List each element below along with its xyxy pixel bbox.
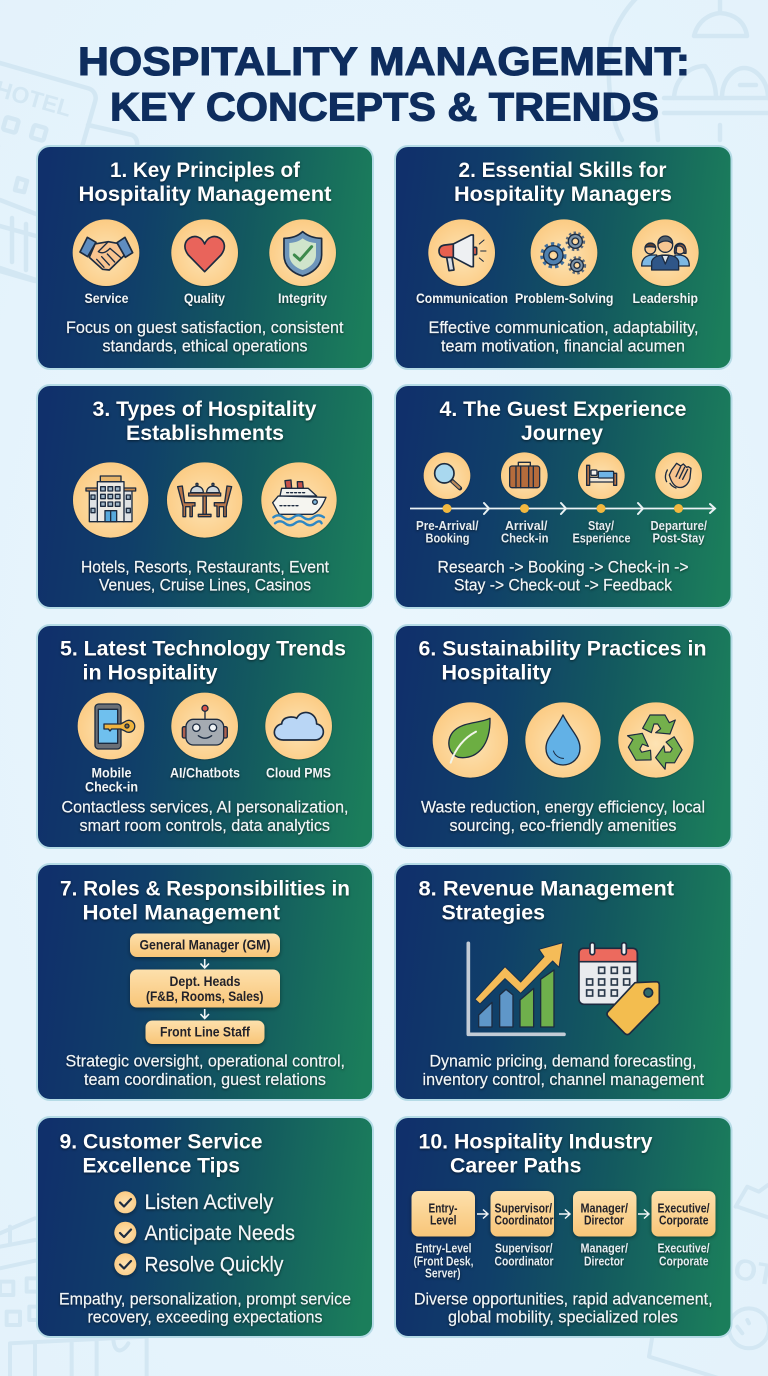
chart: rising bars and arrow xyxy=(468,943,564,1034)
icon: mobile check-in xyxy=(78,693,144,759)
journey stage labels: Pre-Arrival/ xyxy=(416,519,479,533)
career flow xyxy=(412,1191,716,1236)
panel: 6 sustainability xyxy=(395,625,732,848)
career stage labels: Corporate xyxy=(659,1254,709,1268)
heading 2 xyxy=(454,159,672,206)
heading 4 xyxy=(440,398,686,445)
description 3: Hotels, Resorts, Restaurants, Event xyxy=(81,558,329,576)
description 2: Effective communication, adaptability, xyxy=(428,318,698,337)
career flow: Corporate xyxy=(659,1214,709,1228)
career stage labels: Executive/ xyxy=(658,1242,710,1256)
icon: heart xyxy=(171,219,238,286)
icon: hotel building xyxy=(73,462,148,538)
heading 7 xyxy=(60,878,350,924)
description 6: sourcing, eco-friendly amenities xyxy=(450,816,676,835)
career stage labels: Coordinator xyxy=(494,1254,554,1268)
description 9: Empathy, personalization, prompt service xyxy=(59,1290,351,1308)
heading 6: Hospitality xyxy=(442,662,552,684)
description 1: standards, ethical operations xyxy=(102,336,308,356)
heading 2: Hospitality Managers xyxy=(454,183,672,206)
heading 10 xyxy=(418,1130,653,1178)
description 4: Research -> Booking -> Check-in -> xyxy=(438,558,689,576)
description 1 xyxy=(66,318,344,356)
heading 3: 3. Types of Hospitality xyxy=(92,398,317,421)
description 7: team coordination, guest relations xyxy=(84,1070,326,1089)
icon: water drop xyxy=(525,702,601,778)
title: KEY CONCEPTS & TRENDS xyxy=(110,86,659,130)
heading 1: Hospitality Management xyxy=(78,183,332,206)
heading 8: 8. Revenue Management xyxy=(418,878,674,900)
description 5: Contactless services, AI personalization, xyxy=(62,798,348,816)
icon: handshake xyxy=(73,219,139,286)
heading 9: Excellence Tips xyxy=(82,1154,240,1178)
org chart: General Manager (GM) xyxy=(140,938,270,952)
watermark: hotel and bell bottom right xyxy=(649,1185,768,1376)
watermark: cloche and globe top right xyxy=(609,0,768,140)
icon: megaphone xyxy=(428,219,495,286)
journey timeline xyxy=(410,503,715,514)
career stage labels: Manager/ xyxy=(580,1242,628,1256)
panel: 5 technology trends xyxy=(37,625,373,848)
description 7 xyxy=(66,1052,345,1089)
journey stage labels: Stay/ xyxy=(588,519,614,533)
org chart: Dept. Heads xyxy=(170,974,240,989)
icon labels 2: Communication xyxy=(416,291,508,306)
icon: cruise ship xyxy=(261,462,337,538)
heading 8 xyxy=(418,878,674,924)
heading 5: in Hospitality xyxy=(82,662,218,684)
watermark: hotel top left xyxy=(0,46,137,283)
description 3: Venues, Cruise Lines, Casinos xyxy=(99,576,311,594)
icon: cloud xyxy=(265,693,332,759)
icon labels 2 xyxy=(416,291,698,306)
journey stage labels xyxy=(416,519,707,546)
heading 3: Establishments xyxy=(126,422,284,445)
panel: 10 career paths xyxy=(395,1117,732,1337)
journey stage labels: Post-Stay xyxy=(652,532,705,546)
career stage labels: (Front Desk, xyxy=(414,1254,474,1268)
icon: leaf xyxy=(433,702,508,778)
org chart xyxy=(130,934,280,1044)
heading 2: 2. Essential Skills for xyxy=(458,159,666,182)
description 1: Focus on guest satisfaction, consistent xyxy=(66,318,344,337)
icon labels 1 xyxy=(84,291,327,306)
description 10: Diverse opportunities, rapid advancement, xyxy=(414,1290,712,1308)
career stage labels: Server) xyxy=(425,1266,460,1280)
icon labels 2: Problem-Solving xyxy=(515,291,614,306)
panel: 4 guest journey xyxy=(395,385,732,608)
heading 4: Journey xyxy=(521,422,603,445)
career stage labels xyxy=(414,1242,710,1280)
career flow: Supervisor/ xyxy=(494,1202,552,1216)
heading 8: Strategies xyxy=(442,902,545,924)
heading 5 xyxy=(60,638,346,684)
heading 6 xyxy=(418,638,706,684)
panel: 1 key principles xyxy=(37,146,373,369)
career flow: Manager/ xyxy=(580,1202,628,1216)
icon: magnifier xyxy=(424,452,470,499)
heading 9: 9. Customer Service xyxy=(60,1130,262,1154)
heading 9 xyxy=(60,1130,262,1178)
description 4: Stay -> Check-out -> Feedback xyxy=(454,576,672,594)
description 5: smart room controls, data analytics xyxy=(80,816,330,835)
heading 10: Career Paths xyxy=(450,1154,582,1178)
icon labels 1: Service xyxy=(84,291,129,306)
icon labels 2: Leadership xyxy=(632,291,698,306)
career flow: Level xyxy=(430,1214,456,1228)
icon labels 5: Cloud PMS xyxy=(266,766,331,780)
panel: 7 roles xyxy=(37,864,373,1100)
journey stage labels: Booking xyxy=(426,532,470,546)
org chart: Front Line Staff xyxy=(160,1024,250,1040)
icon: calendar and price tag xyxy=(579,943,659,1035)
checklist: Resolve Quickly xyxy=(144,1254,284,1276)
icon: dining table xyxy=(167,462,242,538)
org chart: (F&B, Rooms, Sales) xyxy=(146,989,264,1004)
icon: recycle xyxy=(618,702,694,778)
career flow: Coordinator xyxy=(494,1214,554,1228)
description 8: Dynamic pricing, demand forecasting, xyxy=(430,1052,696,1070)
heading 6: 6. Sustainability Practices in xyxy=(418,638,706,660)
heading 10: 10. Hospitality Industry xyxy=(418,1130,653,1154)
description 5 xyxy=(62,798,348,835)
journey stage labels: Departure/ xyxy=(650,519,707,533)
heading 7: Hotel Management xyxy=(82,902,280,924)
checklist: Anticipate Needs xyxy=(144,1222,295,1245)
checklist: Listen Actively xyxy=(144,1191,274,1214)
heading 1 xyxy=(78,159,332,206)
icon: waving hand xyxy=(655,452,702,499)
icon: shield xyxy=(269,219,336,286)
description 6: Waste reduction, energy efficiency, local xyxy=(421,798,705,816)
icon labels 5: Mobile xyxy=(92,766,132,780)
icon: gears xyxy=(531,219,597,286)
journey stage labels: Esperience xyxy=(572,532,631,546)
icon labels 5: AI/Chatbots xyxy=(170,766,240,780)
heading 7: 7. Roles & Responsibilities in xyxy=(60,878,350,900)
journey stage labels: Check-in xyxy=(501,532,548,546)
description 9: recovery, exceeding expectations xyxy=(88,1308,322,1326)
description 8 xyxy=(422,1052,704,1089)
watermark: hotel bottom left xyxy=(0,1218,147,1376)
panel: 9 customer service xyxy=(37,1117,373,1337)
description 2: team motivation, financial acumen xyxy=(441,336,685,356)
career stage labels: Supervisor/ xyxy=(495,1242,553,1256)
journey stage labels: Arrival/ xyxy=(505,519,548,533)
icon labels 1: Quality xyxy=(184,291,225,306)
heading 5: 5. Latest Technology Trends xyxy=(60,638,346,660)
icon labels 5 xyxy=(85,766,331,794)
career stage labels: Entry-Level xyxy=(416,1242,472,1256)
icon labels 1: Integrity xyxy=(278,291,327,306)
title: HOSPITALITY MANAGEMENT: xyxy=(78,40,690,84)
description 3 xyxy=(81,558,329,594)
career flow: Director xyxy=(584,1214,624,1228)
description 10: global mobility, specialized roles xyxy=(448,1308,678,1326)
heading 3 xyxy=(92,398,317,445)
description 7: Strategic oversight, operational control, xyxy=(66,1052,345,1070)
description 10 xyxy=(414,1290,712,1326)
checklist xyxy=(114,1191,295,1276)
description 2 xyxy=(428,318,698,356)
icon: robot xyxy=(171,693,238,759)
description 6 xyxy=(421,798,705,835)
career flow: Executive/ xyxy=(658,1202,710,1216)
panel: 3 establishments xyxy=(37,385,373,608)
description 4 xyxy=(438,558,689,594)
panel: 2 essential skills xyxy=(395,146,732,369)
career flow: Entry- xyxy=(428,1202,458,1216)
heading 1: 1. Key Principles of xyxy=(110,159,301,182)
icon labels 5: Check-in xyxy=(85,780,138,794)
icon: suitcase xyxy=(501,452,548,499)
panel: 8 revenue xyxy=(395,864,732,1100)
heading 4: 4. The Guest Experience xyxy=(440,398,686,421)
career stage labels: Director xyxy=(584,1254,624,1268)
title xyxy=(78,40,690,130)
description 9 xyxy=(59,1290,351,1326)
icon: leadership team xyxy=(632,219,699,286)
icon: bed xyxy=(578,452,625,499)
description 8: inventory control, channel management xyxy=(422,1070,704,1089)
